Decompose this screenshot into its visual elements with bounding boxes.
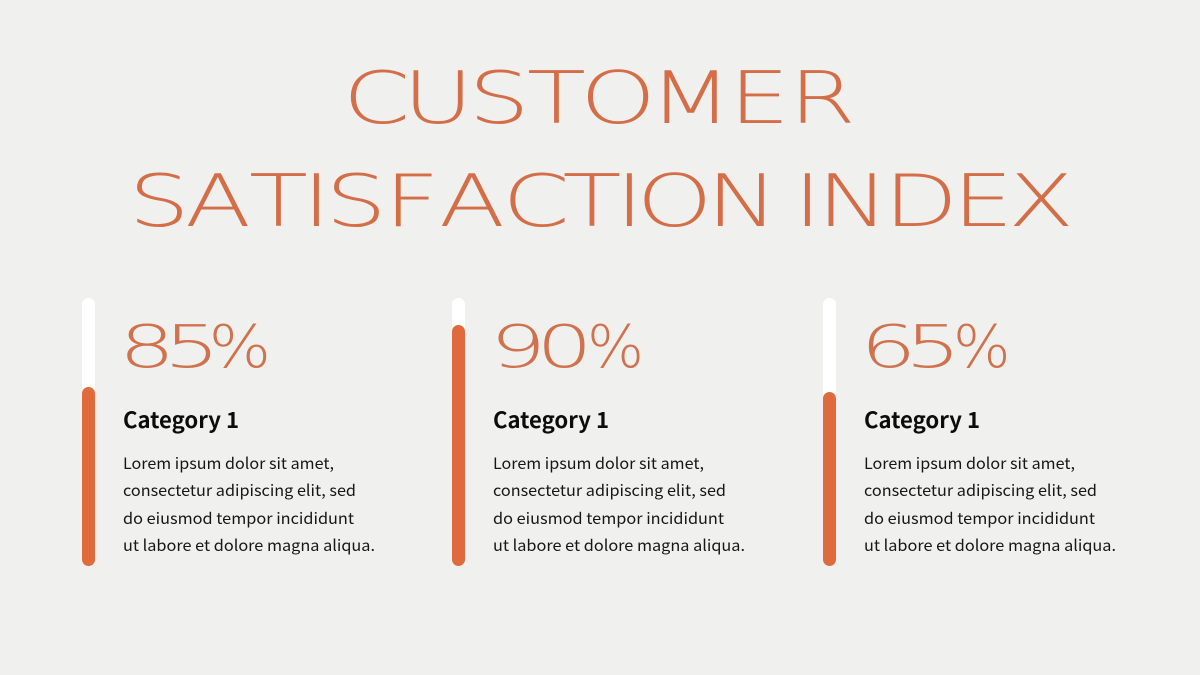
body text — [493, 452, 745, 556]
title: SATISFACTION INDEX — [129, 160, 1074, 244]
value: 65%: % — [953, 312, 1010, 381]
value: 90% — [490, 312, 644, 381]
value: 85%: 85 — [119, 312, 220, 381]
body text: consectetur adipiscing elit, sed — [123, 479, 356, 501]
progress bar: 90% — [452, 298, 465, 566]
heading: category: Category 1 — [123, 403, 239, 435]
body text: consectetur adipiscing elit, sed — [493, 479, 726, 501]
value: 85% — [119, 312, 271, 381]
value: 85%: % — [209, 312, 271, 381]
body text — [123, 452, 375, 556]
value: 90%: % — [587, 312, 644, 381]
value: 90%: 90 — [490, 312, 593, 381]
panel: 65% — [823, 298, 1116, 566]
body text: Lorem ipsum dolor sit amet, — [864, 452, 1075, 474]
body text: Lorem ipsum dolor sit amet, — [493, 452, 704, 474]
progress bar: 85% — [82, 298, 95, 566]
title — [129, 57, 1074, 244]
panel: 85% — [82, 298, 375, 566]
progress bar: 65% — [823, 298, 836, 566]
body text: ut labore et dolore magna aliqua. — [123, 534, 375, 556]
body text: do eiusmod tempor incididunt — [123, 507, 354, 529]
value: 65%: 65 — [860, 312, 961, 381]
body text: ut labore et dolore magna aliqua. — [493, 534, 745, 556]
body text: do eiusmod tempor incididunt — [864, 507, 1095, 529]
panel: 90% — [452, 298, 745, 566]
body text: do eiusmod tempor incididunt — [493, 507, 724, 529]
heading: category: Category 1 — [864, 403, 980, 435]
body text: consectetur adipiscing elit, sed — [864, 479, 1097, 501]
body text — [864, 452, 1116, 556]
body text: Lorem ipsum dolor sit amet, — [123, 452, 334, 474]
heading: category: Category 1 — [493, 403, 609, 435]
body text: ut labore et dolore magna aliqua. — [864, 534, 1116, 556]
title: CUSTOMER — [343, 57, 856, 141]
value: 65% — [860, 312, 1010, 381]
